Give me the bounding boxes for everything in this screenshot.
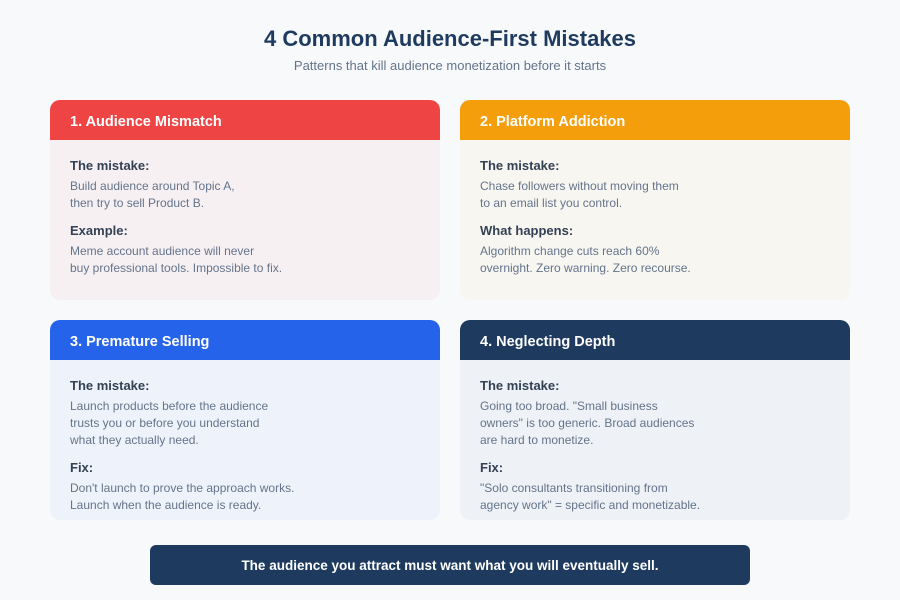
body: platform addiction bbox=[480, 158, 691, 275]
header: neglecting depth bbox=[460, 320, 850, 360]
body: neglecting depth: Fix: bbox=[480, 460, 503, 475]
body: audience mismatch: then try to sell Product B. bbox=[70, 196, 204, 210]
body: platform addiction: overnight. Zero warning. Zero recourse. bbox=[480, 261, 691, 275]
subtitle: Patterns that kill audience monetization before it starts bbox=[294, 58, 606, 73]
body: premature selling: Launch products before the audience bbox=[70, 399, 268, 413]
body: neglecting depth: The mistake: bbox=[480, 378, 559, 393]
body: neglecting depth: owners" is too generic. Broad audiences bbox=[480, 416, 694, 430]
body: platform addiction: What happens: bbox=[480, 223, 573, 238]
banner: takeaway bbox=[150, 545, 750, 585]
header: audience mismatch: 1. Audience Mismatch bbox=[70, 114, 222, 130]
body: platform addiction: Chase followers without moving them bbox=[480, 179, 679, 193]
header: premature selling: 3. Premature Selling bbox=[70, 334, 209, 350]
title: 4 Common Audience-First Mistakes bbox=[264, 26, 636, 51]
header: neglecting depth: 4. Neglecting Depth bbox=[480, 334, 615, 350]
body: premature selling: The mistake: bbox=[70, 378, 149, 393]
body: premature selling: what they actually need. bbox=[70, 433, 199, 447]
body: premature selling bbox=[70, 378, 294, 512]
body: neglecting depth: Going too broad. "Small business bbox=[480, 399, 658, 413]
body: audience mismatch bbox=[70, 158, 282, 275]
body: neglecting depth: agency work" = specific and monetizable. bbox=[480, 498, 700, 512]
body: neglecting depth: are hard to monetize. bbox=[480, 433, 593, 447]
body: audience mismatch: The mistake: bbox=[70, 158, 149, 173]
header: audience mismatch bbox=[50, 100, 440, 140]
body: platform addiction: The mistake: bbox=[480, 158, 559, 173]
body: audience mismatch: Meme account audience will never bbox=[70, 244, 254, 258]
body: audience mismatch: Example: bbox=[70, 223, 128, 238]
banner: takeaway: The audience you attract must want what you will eventually sell. bbox=[241, 558, 659, 573]
body: neglecting depth: "Solo consultants transitioning from bbox=[480, 481, 668, 495]
body: neglecting depth bbox=[480, 378, 700, 512]
body: premature selling: Fix: bbox=[70, 460, 93, 475]
body: premature selling: Don't launch to prove the approach works. bbox=[70, 481, 294, 495]
panel: premature selling bbox=[50, 320, 440, 520]
body: platform addiction: Algorithm change cuts reach 60% bbox=[480, 244, 659, 258]
panel: audience mismatch bbox=[50, 100, 440, 300]
header: platform addiction: 2. Platform Addiction bbox=[480, 114, 625, 130]
body: audience mismatch: buy professional tools. Impossible to fix. bbox=[70, 261, 282, 275]
header: platform addiction bbox=[460, 100, 850, 140]
panel: platform addiction bbox=[460, 100, 850, 300]
body: audience mismatch: Build audience around Topic A, bbox=[70, 179, 235, 193]
body: premature selling: Launch when the audience is ready. bbox=[70, 498, 261, 512]
panel: neglecting depth bbox=[460, 320, 850, 520]
body: platform addiction: to an email list you control. bbox=[480, 196, 622, 210]
header: premature selling bbox=[50, 320, 440, 360]
body: premature selling: trusts you or before you understand bbox=[70, 416, 259, 430]
